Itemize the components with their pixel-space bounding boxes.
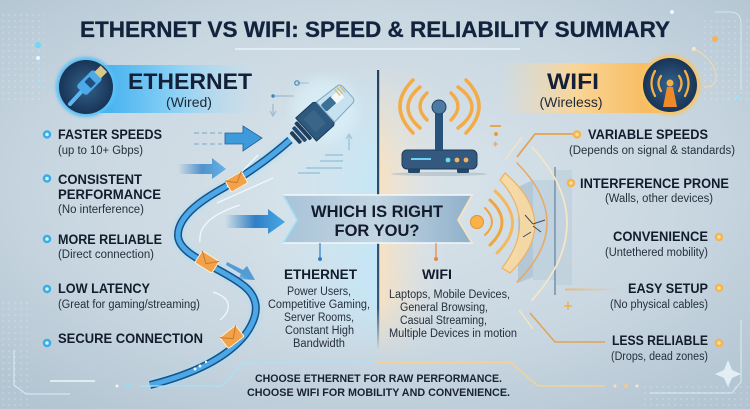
wifi drawbacks: EASY SETUP <box>628 281 708 296</box>
ethernet benefits: MORE RELIABLE <box>58 232 162 247</box>
ethernet use cases: ETHERNET <box>284 267 358 282</box>
ethernet use cases: Competitive Gaming, <box>268 299 370 311</box>
ethernet benefits: LOW LATENCY <box>58 281 150 296</box>
arrows <box>178 81 352 280</box>
wifi signal waves <box>470 134 620 342</box>
wifi drawbacks: (Drops, dead zones) <box>611 351 708 363</box>
wifi use cases <box>389 243 517 340</box>
wifi drawbacks: INTERFERENCE PRONE <box>580 176 729 191</box>
bottom callout: CHOOSE WIFI FOR MOBILITY AND CONVENIENCE. <box>247 387 510 399</box>
wifi drawbacks: (Walls, other devices) <box>605 193 713 205</box>
title: ETHERNET VS WIFI: SPEED & RELIABILITY SUMMARY <box>80 17 670 42</box>
wifi drawbacks: (No physical cables) <box>610 299 708 311</box>
icon: envelope <box>220 325 244 349</box>
icon: envelope <box>195 251 219 273</box>
ethernet benefits: PERFORMANCE <box>58 187 161 202</box>
wifi drawbacks: (Depends on signal & standards) <box>569 145 735 157</box>
ethernet use cases: Server Rooms, <box>284 312 354 324</box>
ethernet benefits: FASTER SPEEDS <box>58 127 162 142</box>
ethernet header: ETHERNET <box>128 69 253 94</box>
bottom callout: CHOOSE ETHERNET FOR RAW PERFORMANCE. <box>255 373 502 385</box>
icon: wifi tower <box>640 55 700 115</box>
wifi drawbacks: CONVENIENCE <box>613 229 708 244</box>
ethernet benefits: (No interference) <box>58 204 144 216</box>
ethernet use cases <box>268 243 370 350</box>
wifi use cases: Laptops, Mobile Devices, <box>389 289 510 301</box>
ethernet use cases: Power Users, <box>287 286 351 298</box>
ethernet benefits: (Great for gaming/streaming) <box>58 299 200 311</box>
wifi use cases: WIFI <box>422 267 452 282</box>
ethernet benefits: CONSISTENT <box>58 172 143 187</box>
icon: ethernet plug <box>56 57 116 117</box>
wifi use cases: General Browsing, <box>400 302 488 314</box>
wifi header: WIFI <box>547 69 599 94</box>
banner: which is right for you: FOR YOU? <box>335 222 419 240</box>
banner: which is right for you <box>283 195 472 243</box>
ethernet use cases: Constant High <box>285 325 354 337</box>
wifi drawbacks: LESS RELIABLE <box>612 333 708 348</box>
bottom callout <box>116 362 638 399</box>
wifi use cases: Casual Streaming, <box>400 315 487 327</box>
cable <box>150 140 290 385</box>
banner: which is right for you: WHICH IS RIGHT <box>311 203 443 221</box>
wifi use cases: Multiple Devices in motion <box>389 328 517 340</box>
ethernet benefits <box>44 127 203 346</box>
icon: envelope <box>225 171 248 192</box>
router <box>391 80 487 176</box>
connector <box>285 78 358 151</box>
center panels <box>314 70 426 349</box>
wifi drawbacks: VARIABLE SPEEDS <box>588 127 708 142</box>
ethernet use cases: Bandwidth <box>293 338 345 350</box>
wifi header <box>500 55 700 115</box>
ethernet header: (Wired) <box>166 94 212 110</box>
ethernet benefits: (Direct connection) <box>58 249 154 261</box>
wifi drawbacks <box>568 127 735 363</box>
ethernet header <box>56 57 275 117</box>
ethernet benefits: (up to 10+ Gbps) <box>58 145 143 157</box>
wifi drawbacks: (Untethered mobility) <box>605 247 708 259</box>
ethernet benefits: SECURE CONNECTION <box>58 331 203 346</box>
wifi header: (Wireless) <box>540 94 602 110</box>
